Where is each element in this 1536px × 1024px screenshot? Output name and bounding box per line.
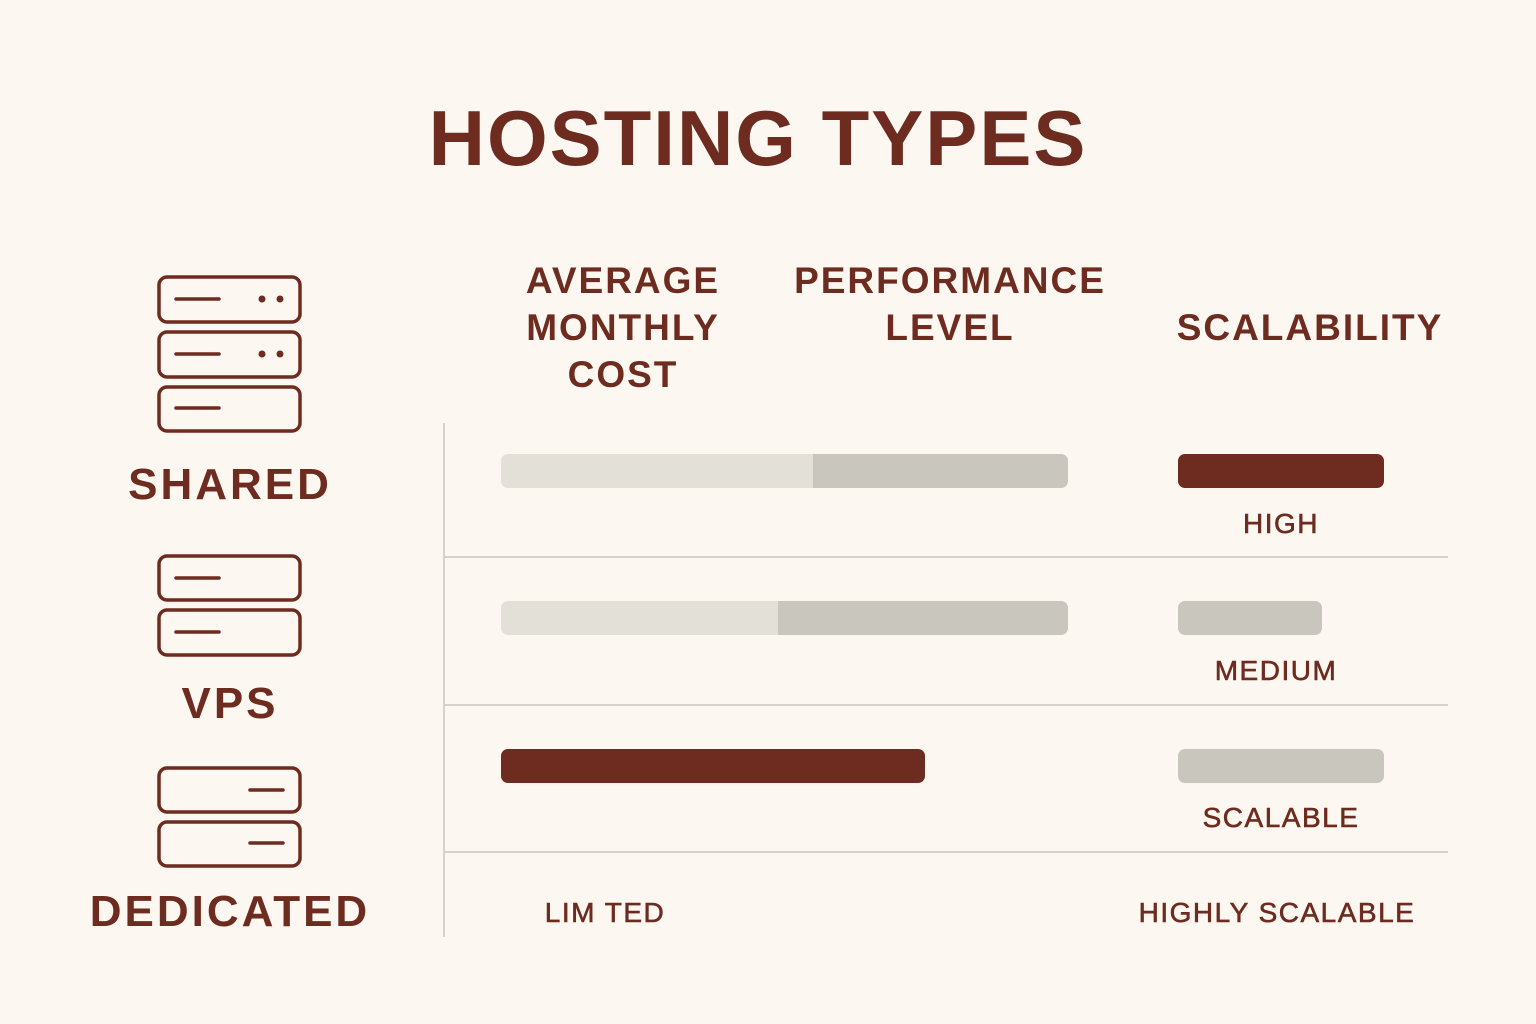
header: average monthly cost: COST — [568, 354, 678, 395]
label: scalable: SCALABLE — [1203, 802, 1359, 833]
label: high: HIGH — [1243, 508, 1319, 539]
header: performance level: LEVEL — [885, 307, 1015, 348]
label: vps: VPS — [181, 679, 279, 728]
header: average monthly cost: MONTHLY — [526, 307, 720, 348]
label: dedicated: DEDICATED — [90, 887, 370, 936]
grid lines — [443, 423, 444, 937]
bar: vps cost/performance — [501, 601, 1068, 635]
header: performance level: PERFORMANCE — [794, 260, 1106, 301]
label: shared: SHARED — [128, 460, 332, 509]
header: average monthly cost — [526, 260, 720, 395]
bar: vps scalability — [1178, 601, 1322, 635]
footer: limited: LIM TED — [545, 897, 665, 928]
bar: dedicated cost/performance — [501, 749, 925, 783]
footer: highly scalable: HIGHLY SCALABLE — [1139, 897, 1415, 928]
header: scalability: SCALABILITY — [1177, 307, 1443, 348]
icon: shared server — [157, 275, 302, 433]
label: medium: MEDIUM — [1215, 655, 1337, 686]
header: average monthly cost: AVERAGE — [526, 260, 720, 301]
title: HOSTING TYPES — [429, 94, 1087, 182]
header: performance level — [794, 260, 1106, 348]
bar: shared scalability — [1178, 454, 1384, 488]
icon: vps server — [157, 554, 302, 657]
bar: shared cost/performance — [501, 454, 1068, 488]
bar: dedicated scalability — [1178, 749, 1384, 783]
icon: dedicated server — [157, 766, 302, 868]
